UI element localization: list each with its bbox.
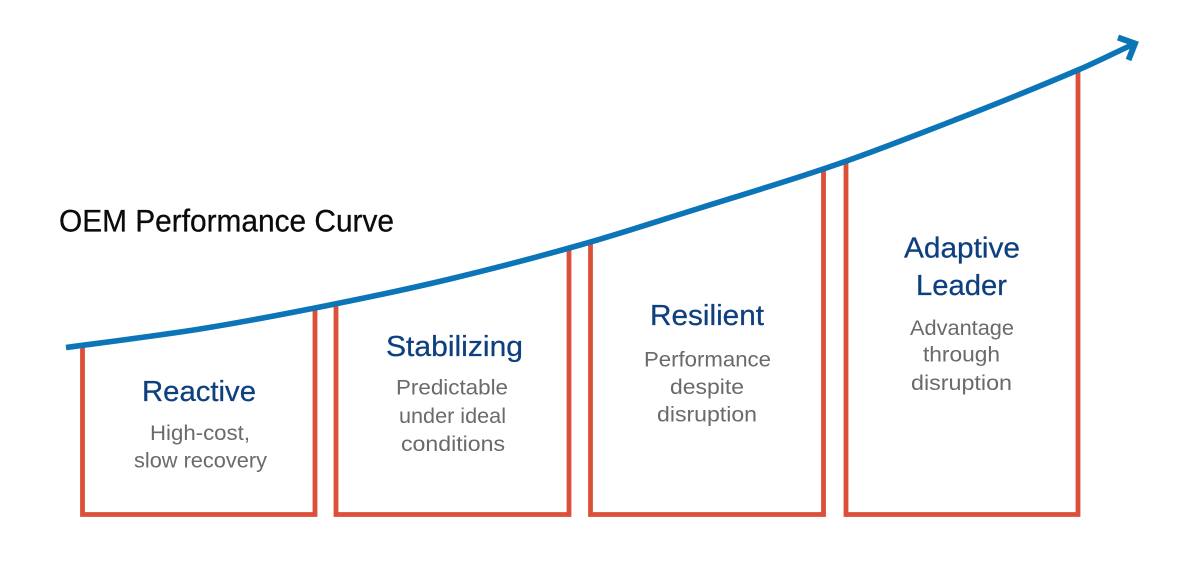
description: Adaptive Leader: Advantage [910, 316, 1014, 340]
panel outline: Stabilizing [336, 247, 569, 514]
heading: Adaptive Leader [904, 232, 1020, 302]
description: Adaptive Leader [910, 316, 1014, 395]
description: Resilient: disruption [657, 402, 757, 426]
panel: Adaptive Leader [846, 70, 1078, 514]
panel: Reactive [82, 308, 315, 514]
description: Reactive [134, 421, 267, 472]
title: OEM Performance Curve [59, 202, 394, 238]
description: Adaptive Leader: through [923, 342, 1000, 366]
arrow: performance curve [66, 38, 1135, 348]
panel: Stabilizing [336, 247, 569, 514]
heading: Stabilizing: Stabilizing [386, 331, 523, 363]
description: Resilient: Performance [644, 348, 771, 372]
heading: Adaptive Leader: Adaptive [904, 232, 1020, 264]
description: Resilient [644, 348, 771, 426]
description: Stabilizing: Predictable [396, 376, 508, 400]
description: Reactive: High-cost, [150, 421, 250, 445]
panel: Resilient [590, 168, 824, 514]
description: Stabilizing: under ideal [399, 404, 506, 428]
panel outline: Adaptive Leader [846, 70, 1078, 514]
description: Stabilizing: conditions [401, 432, 505, 456]
description: Stabilizing [396, 376, 508, 456]
panel outline: Resilient [590, 168, 824, 514]
description: Reactive: slow recovery [134, 448, 267, 472]
description: Adaptive Leader: disruption [911, 371, 1012, 395]
description: Resilient: despite [670, 375, 744, 399]
panel outline: Reactive [82, 308, 315, 514]
heading: Adaptive Leader: Leader [916, 270, 1008, 302]
heading: Reactive: Reactive [142, 376, 256, 408]
heading: Resilient: Resilient [650, 300, 764, 332]
